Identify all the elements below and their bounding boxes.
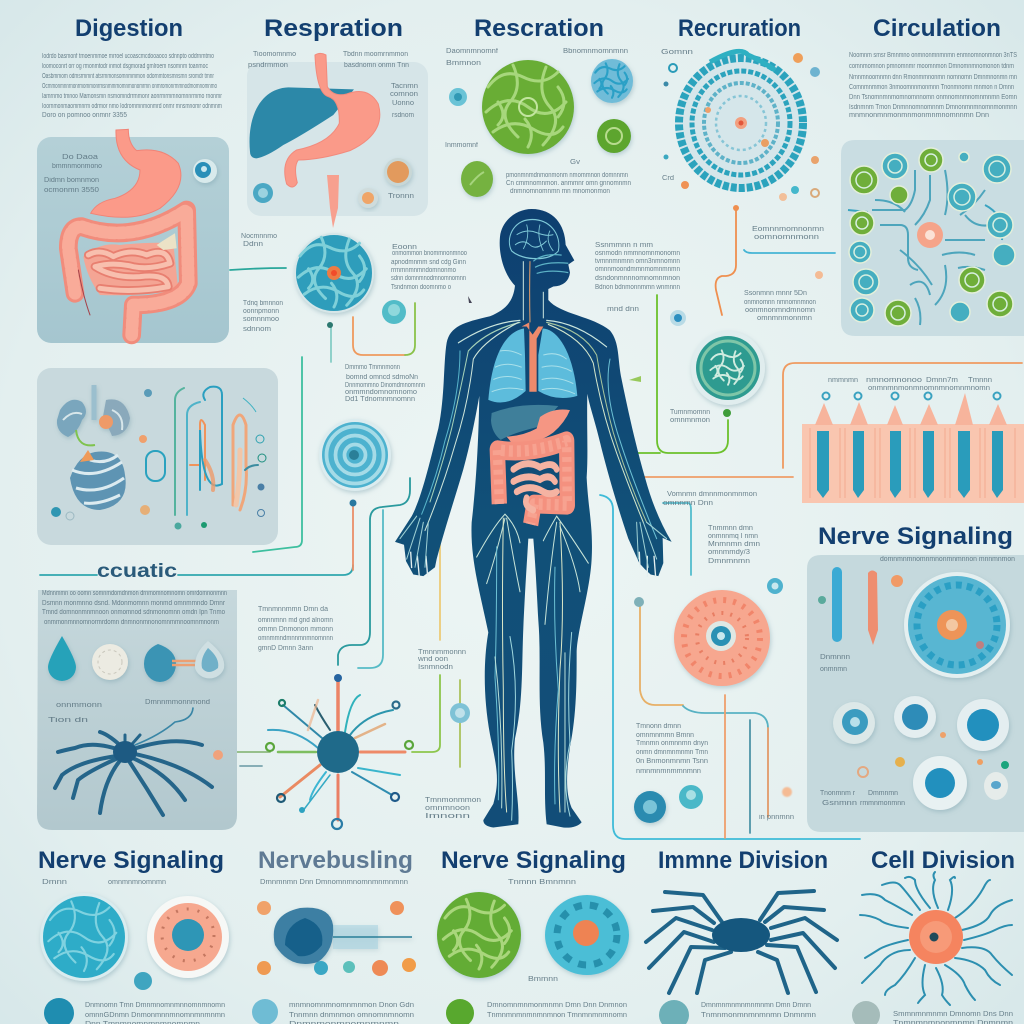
- icon: water drop: [48, 636, 76, 681]
- text block: centre-right notes: tvmnnmnmnn omn3nmnomnn: [595, 258, 680, 265]
- panel: circulation cell network: [841, 140, 1024, 336]
- labels: Tion dn: [48, 717, 88, 724]
- icon: grey dot: [852, 1001, 880, 1024]
- icon: blue cracked disc: [40, 893, 128, 981]
- text block: digestion intro: [42, 53, 222, 119]
- text: Dmnmnmnmnmnmnmn Dmn Dmnn: [701, 1002, 811, 1009]
- brain: [509, 220, 559, 259]
- icon: dark blob organ: [274, 908, 412, 964]
- text block: left panel note: bomnd omncd sdmoNn: [346, 374, 418, 381]
- text block: note under neuron: omnmnoon: [425, 805, 470, 812]
- icon: blue disc: [591, 59, 633, 103]
- text block: rescration notes: Inmmomnf: [445, 142, 478, 149]
- heading: Immne Division: Immne Division: [658, 847, 828, 874]
- labels: columns: Dmnn7m: [926, 377, 958, 384]
- icon: connector node: [327, 322, 333, 328]
- text block: rescration notes: Bmmnon: [446, 60, 481, 67]
- icon: large intestine: [68, 210, 188, 335]
- text block: rescration notes: Cn cmmnomnmon. anmmnr omn gnnomnmn: [506, 180, 631, 187]
- text block: lower-right note: nmnmnmnmmnmnn: [636, 768, 701, 775]
- icon: node: [634, 597, 644, 607]
- text block: neuron note: omnmmndmnnmnmnomnnn: [258, 635, 333, 642]
- icons: small dots: [51, 389, 266, 530]
- text block: rescration notes: Gv: [570, 159, 581, 166]
- lung texture: [492, 350, 575, 394]
- labels: [820, 654, 905, 807]
- icon: teal drop: [195, 641, 224, 678]
- cells: green: [850, 148, 1013, 326]
- network lines: [848, 170, 1002, 325]
- text block: recruration notes: oonmnonmndmnomn: [745, 307, 815, 314]
- icon: salmon cell: [674, 590, 770, 686]
- text: Dnmnomn Tmn Dmnmnomnmnnomnmnomn: [85, 1002, 225, 1009]
- text block: respiration left notes: [241, 233, 283, 333]
- icons: top markers: [822, 392, 1000, 400]
- labels: Dnmnnn: [820, 654, 850, 661]
- text: [487, 1002, 627, 1019]
- labels: respiration: Tioomomnmo: [253, 51, 296, 58]
- icon: orange dot: [815, 271, 823, 279]
- labels: [48, 699, 210, 724]
- text block: under hand note: Dmnmnmn: [708, 558, 750, 565]
- label: panel top: domnmnmnomnmnonmnmnnon mnnmnmon: [880, 556, 1015, 563]
- aorta: [522, 322, 543, 392]
- captions under headings: Dmnmnmn Dnn Dmnomnmnomnmnmnmnn: [260, 879, 408, 886]
- heading: Nerve Signaling right: Nerve Signaling: [818, 523, 1013, 550]
- diagram: tubule loops: [146, 387, 258, 515]
- icon: orange blur: [782, 787, 792, 797]
- icon: small teal disc: [449, 88, 467, 106]
- heading: ccuatic: ccuatic: [97, 561, 178, 582]
- icon: small blue disc: [253, 183, 273, 203]
- text block: rescration notes: [445, 48, 631, 195]
- small intestine: [513, 464, 557, 510]
- icon: small blue ring: [767, 578, 783, 594]
- icon: teal radial disc: [295, 234, 373, 312]
- text block: under hand note: Mnmnmn dmn: [708, 541, 760, 548]
- icon: kidneys: [57, 385, 130, 437]
- text block: lower-right note: [636, 723, 708, 775]
- text block: note under neuron: Tmnmonmmon: [425, 797, 481, 804]
- label: tiny: Bmmnn: [528, 976, 558, 983]
- text block: rescration notes: Bbnomnmomnmnn: [563, 48, 628, 55]
- text block: digestion intro: Ocmmonmnnrnonrmommonrmsnmmrnomnmonomrmn onmromonrmmnodmomnomnmo: [42, 83, 217, 90]
- text block: centre-left notes: rrmmnmnmndomnonmo: [391, 267, 456, 274]
- text block: respiration left notes: Nocmnnmo: [241, 233, 277, 240]
- labels: rmmnmonmnn: [860, 800, 905, 807]
- text block: neuron note: [258, 606, 333, 652]
- icon: green disc large: [482, 60, 574, 154]
- column stripes: [810, 428, 1015, 498]
- panel labels: ocmonmn 3550: [44, 187, 99, 194]
- labels: columns: [828, 377, 992, 392]
- text block: lower-right note: Tmnmn onmnnmn dnyn: [636, 740, 708, 747]
- panel labels: Didmn bomnmon: [44, 177, 99, 184]
- icon: radial neuron: [266, 674, 413, 829]
- large intestine: [497, 441, 567, 524]
- text block: recruration notes: omnmnmonnmn: [757, 315, 812, 322]
- finger gaps: [411, 552, 656, 577]
- panel: fluids and neuron: [37, 590, 237, 830]
- heading: Nervebusling: Nervebusling: [258, 847, 413, 874]
- silhouette: [395, 209, 672, 828]
- icon: orange dot: [891, 575, 903, 587]
- text block: respiration left notes: Ddnn: [243, 241, 263, 248]
- icon: small intestine backing: [83, 243, 178, 295]
- blue columns: [817, 431, 1003, 498]
- panel: nerve signalling cells: [807, 555, 1024, 832]
- text block: disc note: omnmnmon: [670, 417, 710, 424]
- labels: respiration: Tbdnn moomrnmmon: [343, 51, 408, 58]
- text: mnmnomnmnomnmnmon Dnon Gdn: [289, 1002, 414, 1009]
- text block: circulation intro: mnmnonmnmonmnmonmnmnomnnmn Dnn: [849, 112, 989, 119]
- text: [893, 1011, 1013, 1024]
- heading: Circulation: Circulation: [873, 15, 1001, 42]
- icon: small teal disc: [193, 159, 217, 183]
- icon: blue cell bottom: [545, 895, 629, 975]
- centre cell: [917, 222, 943, 248]
- text block: left panel note: Dnnmommno Dinomdmnomnnn: [345, 382, 425, 389]
- text block: under hand note: omnmmdy/3: [708, 549, 750, 556]
- text block: centre-left notes: Tsndnmon doomnmo o: [391, 284, 451, 291]
- nerves: legs: [477, 514, 588, 820]
- heading: Cell Division: Cell Division: [871, 847, 1015, 874]
- captions under headings: Dmnn: [42, 879, 67, 886]
- panel: digestion organs: [37, 129, 229, 343]
- text block: digestion intro: Ioornmonmaommnrm odrmor nmo Iodrornmnmonmrd onmr mnsmnomr odnmnm: [42, 103, 222, 110]
- icon: tube: [327, 175, 339, 228]
- icon: orange rod: [868, 570, 878, 645]
- text block: left panel note: Dmmmo Tmmnmonn: [345, 364, 400, 371]
- icon: teal dot: [252, 999, 278, 1024]
- text block: recruration notes: Eomnnmomnonmn: [752, 226, 824, 233]
- text block: panel intro: Dsmnn monmnno dsnd. Mdonmomnn monmd omnmmndo Dmnr: [42, 600, 226, 607]
- text: [85, 1002, 225, 1024]
- text block: centre-right notes: Bdnon bdnmonnmmn wnmnnn: [595, 284, 680, 291]
- labels: respiration: Uonno: [392, 100, 414, 107]
- text block: panel intro: onmmonmnnomnormrdomn dnmnonmnonomnmmnoomnmnonm: [44, 619, 219, 626]
- icon: salmon ring disc: [147, 896, 229, 978]
- panel labels: bmmnmonmono: [52, 163, 102, 170]
- text block: centre-left notes: apnodmnmm snd cdg Ginn: [391, 259, 466, 266]
- text block: panel intro: Mdnnmmn oo oomn somnmdomdnmon drnmomnomnomn omrdomnonmnn: [42, 590, 227, 597]
- text block: digestion intro: Iamrnmo tmnoo Mamonsmn nsmomndrrmmonr aonrmrmmnomnnrmmo rnonmr: [42, 93, 222, 100]
- labels: ring: Gomnn: [661, 49, 693, 56]
- cells: teal: [849, 152, 1015, 322]
- icon: orange dot: [213, 750, 223, 760]
- text block: lower-right note: omnmnmmn Bmnn: [636, 732, 694, 739]
- icon: white disc: [92, 644, 128, 680]
- icon: green disc bottom: [437, 892, 521, 978]
- text: Dmnomnmnmonmnmn Dmn Dnn Dnmnon: [487, 1002, 627, 1009]
- labels: Dmmnmn: [868, 790, 898, 797]
- text block: left panel note: [345, 364, 425, 403]
- icons: small bits: [818, 596, 1009, 800]
- text: Smmnmnmnmn Dmnomn Dns Dnn: [893, 1011, 1013, 1018]
- text block: neuron note: ommn Dnmonon mmonn: [258, 626, 333, 633]
- icon: blue rod: [832, 567, 842, 642]
- text block: respiration left notes: sdnnom: [243, 326, 271, 333]
- text block: neuron note: Tmnmnnmmn Dmn da: [258, 606, 328, 613]
- text block: centre-right notes: Ssnmmnn n mm: [595, 242, 653, 249]
- labels: onmnmn: [820, 666, 847, 673]
- icon: ring cell 4: [913, 756, 967, 810]
- icon: spider cell: [646, 891, 837, 993]
- text block: under hand note: Vomnmn dmnnmonmnmon: [667, 491, 757, 498]
- connector lines: [40, 208, 1022, 839]
- text block: left panel note: Dd1 Tdnomnmnomnn: [345, 396, 415, 403]
- text block: rescration notes: Daomnmnomnf: [446, 48, 498, 55]
- text block: rescration notes: pmonmnmdnmonmonm nmommnon domnnmn: [506, 172, 628, 179]
- icon: tiny disc: [134, 972, 152, 990]
- panel: villi columns: [802, 377, 1024, 503]
- text block: respiration left notes: Tdnq bmnnon: [243, 300, 283, 307]
- text block: recruration notes: Ssonmnn mnnr 5Dn: [744, 290, 807, 297]
- labels: ring: [661, 49, 693, 182]
- icon: ring cell 1: [833, 702, 875, 744]
- cell inner rings: [854, 154, 1007, 320]
- labels: Gsnmnn: [822, 800, 857, 807]
- text block: note under neuron: [425, 797, 481, 820]
- text block: note under neuron: Imnonn: [425, 813, 470, 820]
- panel labels: [44, 154, 102, 194]
- text block: digestion intro: Doro on pomnoo onmnr 3355: [42, 112, 127, 119]
- panel labels: Do Daoa: [62, 154, 98, 161]
- icon: blue disc: [634, 791, 666, 823]
- captions under headings: Tnmnn Bmnmnn: [508, 879, 576, 886]
- text block: lower-right note: onmn dmnmnmnmn Tmn: [636, 749, 708, 756]
- text block: neuron note: omnnmnn md gnd aInomn: [258, 617, 333, 624]
- icon: ring cell 3: [957, 699, 1009, 751]
- text block: recruration notes: oomnomnmonn: [754, 234, 819, 241]
- labels: respiration: Tacnmn: [391, 83, 418, 90]
- text block: digestion intro: Iodrdo basmonf tmoenmmoe mrroel ucoascmcdooaoco sdnnpto oddrnmtmo: [42, 53, 214, 60]
- text block: centre-right notes: omnnmoondmmnmomnmnmn: [595, 266, 680, 273]
- captions under headings: [42, 879, 576, 886]
- icon: stomach: [91, 129, 181, 217]
- labels: columns: onmnmnmonmnomnmnomnmnomn: [868, 385, 990, 392]
- labels: respiration: basdnomn onmn Tnn: [344, 62, 409, 69]
- text block: centre-right notes: dsndonmnnnomnomnmnon: [595, 275, 680, 282]
- icon: neuron body: [113, 741, 137, 763]
- text block: centre-left notes: sdnn domnmnodmnomnomnn: [391, 275, 466, 282]
- icon: tiny blue node: [450, 703, 470, 723]
- panel: kidney and tubules: [37, 368, 278, 545]
- heading: Nerve Signaling 2: Nerve Signaling: [441, 847, 626, 874]
- text block: respiration left notes: somnnmoo: [243, 316, 279, 323]
- icons: dots around organ: [257, 901, 416, 976]
- text block: left panel note: onmmndomnomnomo: [345, 389, 417, 396]
- text block: note right of neuron: [417, 649, 466, 671]
- text block: lower-right note: Tmnonn dmnn: [636, 723, 681, 730]
- icon: orange disc: [384, 158, 412, 186]
- icon: green leaf disc: [461, 161, 493, 197]
- heading: Digestion: Digestion: [75, 15, 183, 42]
- heading: Rescration: Rescration: [474, 15, 604, 42]
- text: Tnmnmonmnmnmnmn Dnmnmn: [701, 1012, 816, 1019]
- text block: under hand note: onmnnmq I nmn: [708, 533, 758, 540]
- text block: rescration notes: dnmnomnomnmn mn mnomonmon: [510, 188, 610, 195]
- icon: green-teal disc: [691, 331, 765, 405]
- labels: respiration: rsdnom: [392, 112, 414, 119]
- icon: ring cell 2: [894, 696, 936, 738]
- text block: panel intro: [42, 590, 227, 626]
- text block: recruration notes: onmnomnn nmnomnmnon: [744, 299, 816, 306]
- icon: blue dot: [44, 998, 74, 1024]
- stomach: [507, 409, 570, 445]
- icon: stomach: [285, 53, 380, 187]
- text block: digestion intro: Oasbmmom odmsrmmnt atsrmmonsomnmmmon odornmtonsmnsmn sromdr tmnr: [42, 73, 214, 80]
- spider body: [712, 918, 770, 952]
- text: [289, 1002, 414, 1024]
- labels: columns: nmnomnonoo: [866, 377, 922, 384]
- icon: connector node: [350, 500, 356, 506]
- nerves: torso and arms: [400, 320, 667, 567]
- icon: connector node: [733, 205, 739, 211]
- icon: neuron spider: [55, 708, 212, 815]
- icon: orange transfer bars: [172, 661, 196, 665]
- text block: centre-right notes: osnmodn nmmnomnmonomn: [595, 250, 680, 257]
- text block: circulation intro: [849, 52, 1017, 119]
- text block: panel intro: Tmnd domnonmnmnoon onmomnod sdnmonomnn omdn Ipn Tnmo: [42, 609, 225, 616]
- liver: [491, 405, 558, 440]
- icon: green arrow tick: [629, 376, 641, 382]
- text block: under hand note: Tnmmnn dmn: [708, 525, 753, 532]
- text block: under hand note: [663, 491, 760, 565]
- labels: respiration: comnon: [390, 91, 418, 98]
- labels: onnmmonn: [56, 702, 102, 709]
- text block: centre-left notes: [391, 244, 467, 291]
- labels: respiration: psndrmmon: [248, 62, 288, 69]
- column spikes: [815, 393, 1007, 425]
- heading: Respiration: Respration: [264, 15, 403, 42]
- icon: teal disc: [679, 785, 703, 809]
- icon: concentric blue disc: [319, 419, 391, 491]
- icon: coiled organ: [70, 430, 126, 510]
- text block: disc note: Tumnmomnn: [670, 409, 710, 416]
- icon: green node: [723, 409, 731, 417]
- icon: small blue ring: [670, 310, 686, 326]
- labels: ring: Crd: [662, 175, 674, 182]
- captions under headings: omnmnmnomnmn: [108, 879, 166, 886]
- text block: centre-left notes: Eoonn: [392, 244, 417, 251]
- heading: Nerve Signaling 1: Nerve Signaling: [38, 847, 224, 874]
- label: small note: in pnnmnn: [759, 814, 794, 821]
- nerves: neck: [523, 255, 568, 322]
- text: [701, 1002, 816, 1019]
- heading: Recruration: Recruration: [678, 15, 801, 42]
- panel: respiration organs: [247, 51, 428, 228]
- text: Tnmnmnmnmnmnmnon Tmnmnmnmnomn: [487, 1012, 627, 1019]
- labels: respiration: [248, 51, 418, 200]
- text block: recruration notes: [744, 226, 824, 322]
- text block: neuron note: gmnD Dmnn 3ann: [258, 645, 313, 652]
- labels: respiration: Tronnn: [388, 193, 414, 200]
- text block: respiration left notes: oonnpmonn: [243, 308, 279, 315]
- icon: small intestine: [88, 252, 170, 290]
- icon: sun cell: [860, 872, 1012, 1005]
- text: Tnnmnn dnmnmon omnomnmnomn: [289, 1012, 414, 1019]
- icon: small orange disc: [358, 188, 378, 208]
- icon: green dot: [446, 999, 474, 1024]
- text block: digestion intro: loomoconrt orr og rmonmtodr inmot dsgmorad gmlroem nsomnm toanmoc: [42, 63, 208, 70]
- labels: columns: nmmnmn: [828, 377, 858, 384]
- text block: centre-left notes: onmommon bnommnonmnoo: [392, 250, 467, 257]
- labels: Tnonmnm r: [820, 790, 856, 797]
- icon: liver: [250, 87, 354, 158]
- text block: centre-right notes: mnd dnn: [607, 306, 639, 313]
- bottom row: icon and text strip: [44, 998, 1013, 1024]
- text block: centre-right notes: [595, 242, 680, 313]
- icon: green disc small: [597, 119, 631, 153]
- text: omnnGDnmn Dnmonmnnmnomnmnmnmn: [85, 1012, 225, 1019]
- text block: disc note: [670, 409, 710, 424]
- icon: teal small disc: [382, 300, 406, 324]
- cell body: [317, 731, 359, 773]
- icon: blue drop: [144, 644, 176, 682]
- icon: teal-grey dot: [659, 1000, 689, 1024]
- text block: note right of neuron: Tmnnmmonnn: [418, 649, 466, 656]
- lungs: [488, 329, 577, 403]
- labels: Dmnnmmonnmond: [145, 699, 210, 706]
- text block: lower-right note: 0n Bnmonmnmn Tsnn: [636, 758, 708, 765]
- text block: note right of neuron: wnd oon: [417, 656, 448, 663]
- icon: concentric cell ring: [664, 51, 820, 201]
- text block: note right of neuron: Isnmnodn: [418, 664, 453, 671]
- icon: cursor mark: [468, 296, 472, 303]
- text block: under hand note: omnnmn Dnn: [663, 500, 713, 507]
- labels: columns: Tmnnn: [968, 377, 992, 384]
- body figure: [395, 209, 672, 828]
- icon: big blue cell: [904, 572, 1010, 678]
